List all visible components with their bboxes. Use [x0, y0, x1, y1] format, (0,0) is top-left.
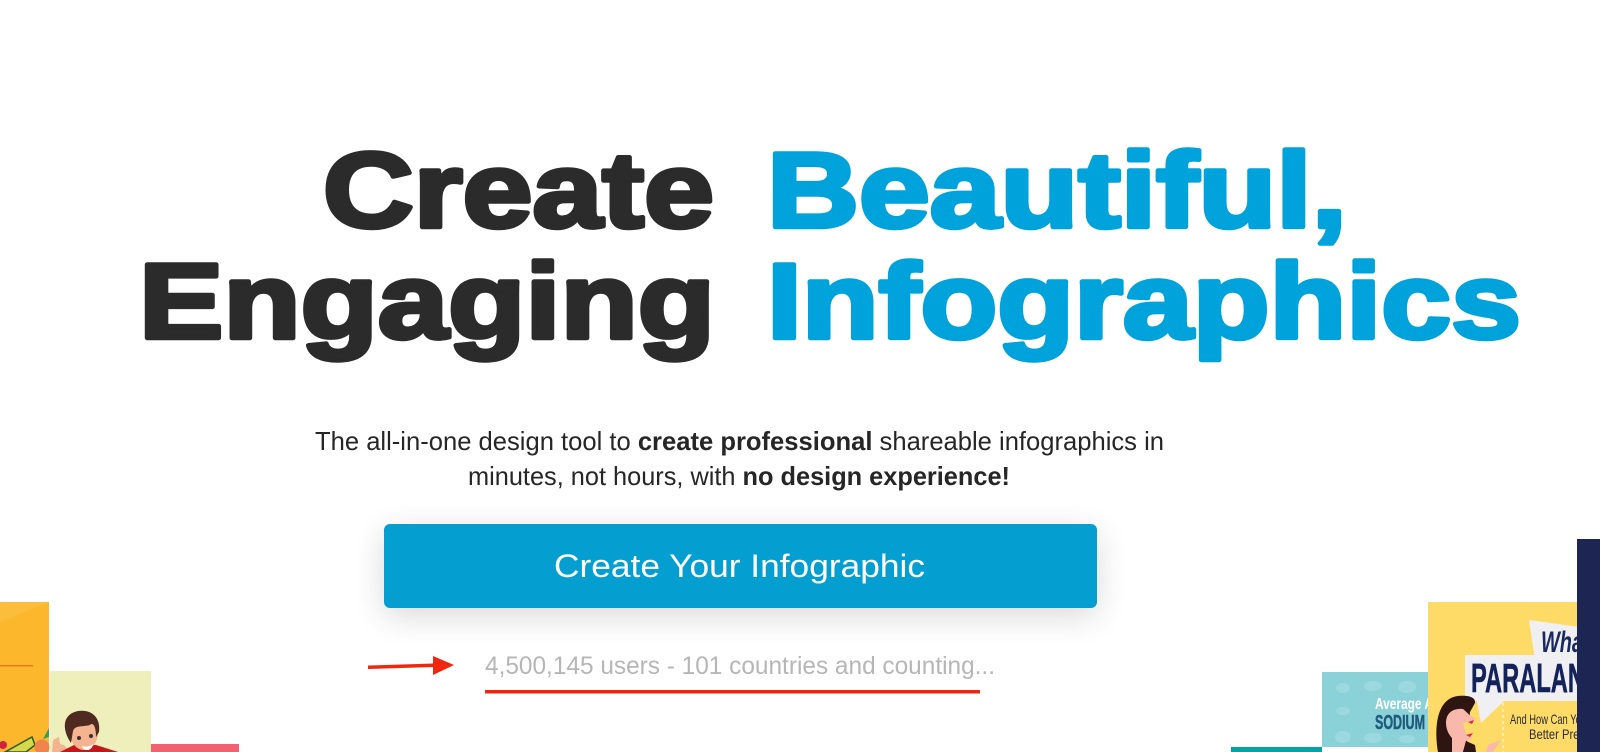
- title word: Engaging: Engaging: [139, 241, 715, 361]
- arrow: red pointing to user count: [368, 656, 454, 675]
- button label: Create Your Infographic: [554, 548, 925, 584]
- subtitle text: minutes, not hours, with no design experience!: [468, 461, 1010, 491]
- title word: Infographics: Infographics: [767, 241, 1521, 361]
- thumbnail pattern icons: [1335, 681, 1416, 743]
- red underline: [485, 690, 980, 694]
- subheading: [1510, 714, 1577, 739]
- title word: Create: Create: [323, 130, 714, 250]
- title word: Beautiful,: Beautiful,: [767, 130, 1347, 250]
- dashed divider: [1502, 703, 1504, 752]
- icon: man giving thumbs up: [52, 711, 118, 752]
- thumbnail: pale green with man: [50, 671, 151, 752]
- thumbnail: coral red: [151, 744, 239, 752]
- heading: average: Average A: [1375, 696, 1433, 713]
- heading: sodium: SODIUM: [1375, 712, 1425, 734]
- user count text: 4,500,145 users - 101 countries and counting...: [485, 652, 995, 680]
- thumbnail: orange fruit infographic: [0, 602, 50, 752]
- thumbnail: dark teal: [1231, 747, 1322, 752]
- button: create your infographic: [384, 524, 1097, 616]
- subtitle text: [315, 426, 1164, 491]
- thumbnail: sodium infographic: [1322, 672, 1433, 747]
- thumbnail: navy panel: [1577, 539, 1600, 752]
- speech bubble: upper: [1529, 620, 1577, 655]
- thumbnail: paralanguage infographic: [1428, 602, 1586, 752]
- title: [139, 130, 1521, 361]
- icon: fruit: [0, 728, 50, 752]
- icon: woman talking: [1436, 696, 1501, 752]
- speech bubble: lower: [1465, 655, 1580, 723]
- subtitle text: The all-in-one design tool to create professional shareable infographics in: [315, 426, 1164, 456]
- subheading: Better Pres: [1529, 726, 1585, 742]
